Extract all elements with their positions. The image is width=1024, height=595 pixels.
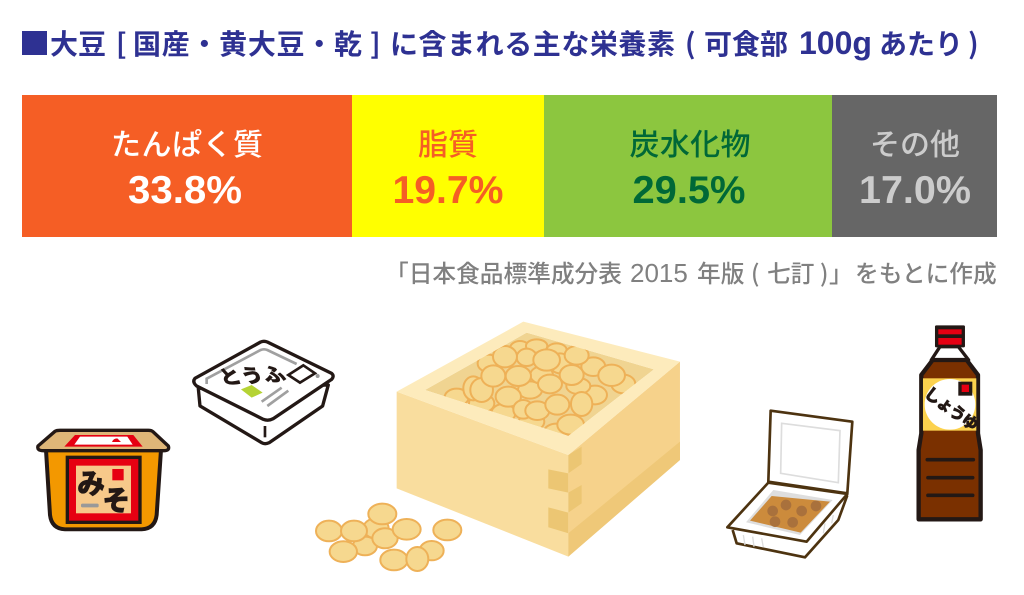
segment: protein 33.8%: 33.8% <box>128 169 242 212</box>
segment: other 17.0% <box>832 95 997 237</box>
title: あたり <box>879 23 963 63</box>
icon: soy sauce bottle <box>919 325 984 519</box>
icon: miso container <box>38 430 169 529</box>
source note: をもとに作成 <box>855 255 997 289</box>
title: 可食部 <box>704 23 788 63</box>
segment: carbohydrate 29.5%: 29.5% <box>632 169 746 212</box>
source note: 」 <box>829 255 853 289</box>
icon: masu wooden box of soybeans <box>397 322 680 557</box>
segment: other 17.0%: その他 <box>870 120 960 164</box>
title: [ <box>116 23 127 63</box>
title: 国産・黄大豆・乾 <box>133 23 362 63</box>
segment: fat 19.7%: 19.7% <box>392 169 504 212</box>
segment: carbohydrate 29.5%: 炭水化物 <box>630 120 750 164</box>
source note: ) <box>820 255 828 289</box>
source note: ( <box>751 255 759 289</box>
source note: 年版 <box>697 255 745 289</box>
segment: fat 19.7%: 脂質 <box>418 120 478 164</box>
segment: carbohydrate 29.5% <box>544 95 832 237</box>
source note: 2015 <box>630 258 688 288</box>
title: に含まれる主な栄養素 <box>390 23 675 63</box>
icon: miso container: み <box>77 461 105 501</box>
source note: 七訂 <box>767 255 814 289</box>
stacked bar: nutrient composition <box>22 95 997 237</box>
icon: soy sauce bottle: しょうゆ <box>920 380 984 436</box>
segment: other 17.0%: 17.0% <box>859 169 971 212</box>
icon: scattered soybeans <box>316 504 461 571</box>
icon: tofu package <box>194 341 333 444</box>
title <box>22 23 979 63</box>
title: 100g <box>799 25 872 61</box>
segment: protein 33.8%: たんぱく質 <box>111 120 263 164</box>
title: ) <box>968 23 979 63</box>
icon: miso container: そ <box>103 478 130 518</box>
icon: tofu package: とうふ <box>214 359 289 389</box>
segment: protein 33.8% <box>22 95 352 237</box>
source note: 「日本食品標準成分表 <box>385 255 622 289</box>
segment: fat 19.7% <box>352 95 544 237</box>
title: 大豆 <box>50 23 106 63</box>
icon: natto pack <box>727 411 852 557</box>
title: ( <box>685 23 696 63</box>
soybeans inside box <box>445 339 635 440</box>
title: ] <box>370 23 381 63</box>
